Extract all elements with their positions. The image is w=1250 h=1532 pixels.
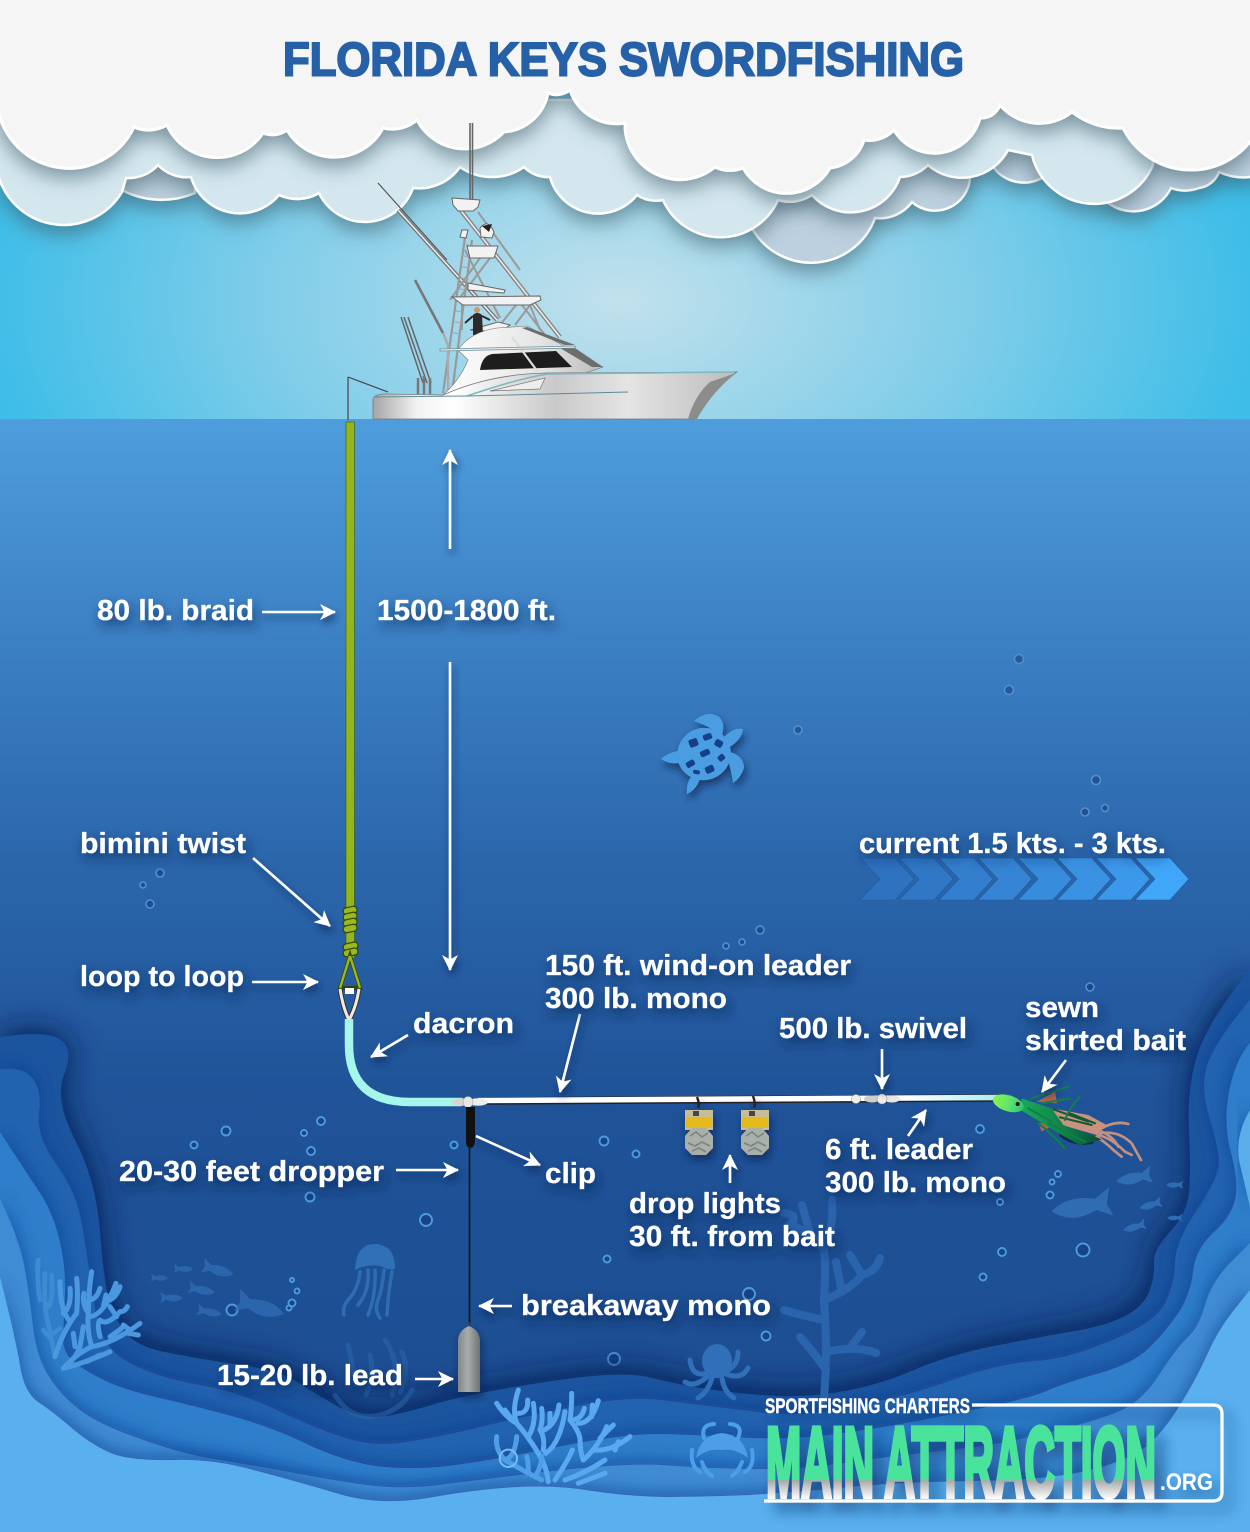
bottom coral bubble bbox=[500, 1450, 517, 1467]
label: 6 ft leader bbox=[825, 1134, 1006, 1199]
arrow: bimini twist bbox=[253, 858, 330, 926]
label: wind-on leader: 300 lb. mono bbox=[545, 983, 727, 1015]
sky background bbox=[0, 0, 1250, 420]
label: breakaway mono: breakaway mono bbox=[521, 1290, 771, 1322]
layer 5 foreground bbox=[0, 1277, 1250, 1532]
arrow: 80 lb braid bbox=[262, 611, 335, 613]
arrow: wind-on leader bbox=[560, 1014, 580, 1092]
turtle shell patches bbox=[685, 732, 726, 775]
back cloud layer bbox=[122, 120, 1250, 263]
drop light one bbox=[685, 1097, 713, 1155]
logo domain: .ORG bbox=[1160, 1469, 1213, 1496]
ocean water bbox=[0, 419, 1250, 1532]
arrow: dropper bbox=[396, 1169, 458, 1171]
label: wind-on leader: 150 ft. wind-on leader bbox=[545, 950, 851, 982]
squid tentacles bbox=[1097, 1123, 1141, 1160]
logo: main attraction bbox=[764, 1395, 1222, 1518]
centre coral bbox=[784, 1200, 880, 1400]
depth arrow up bbox=[449, 450, 451, 549]
arrow: dacron bbox=[371, 1035, 408, 1057]
bubbles bbox=[190, 1117, 1090, 1365]
octopus arms bbox=[685, 1352, 748, 1398]
left coral bbox=[38, 1260, 140, 1368]
arrow: 6 ft leader bbox=[908, 1110, 926, 1136]
boat trim lines bbox=[375, 346, 735, 397]
dacron line bbox=[349, 1019, 462, 1102]
octopus bbox=[685, 1344, 748, 1398]
skirted squid bait bbox=[991, 1087, 1141, 1160]
angler on boat bbox=[465, 307, 490, 335]
arrow: lead bbox=[415, 1378, 453, 1380]
school of fish right bbox=[1049, 1166, 1183, 1235]
500 lb swivel bbox=[852, 1094, 900, 1104]
boat cabin bbox=[443, 326, 603, 395]
boat bow shading bbox=[688, 373, 736, 419]
arrow: swivel bbox=[881, 1049, 883, 1089]
label: dropper: 20-30 feet dropper bbox=[119, 1156, 384, 1188]
lead weight bbox=[458, 1321, 480, 1392]
paper clouds bbox=[0, 0, 1250, 263]
jellyfish tentacles bbox=[344, 1270, 392, 1318]
label: lead: 15-20 lb. lead bbox=[217, 1360, 403, 1392]
boat radar dome bbox=[482, 224, 492, 232]
label: sewn skirted bait: sewn bbox=[1025, 992, 1099, 1024]
label: depth: 1500-1800 ft. bbox=[377, 595, 556, 627]
clip connector bbox=[451, 1096, 488, 1108]
label: loop to loop: loop to loop bbox=[80, 961, 244, 993]
turtle flippers bbox=[661, 714, 744, 794]
arrow: drop lights bbox=[729, 1155, 731, 1183]
layer 3 bbox=[0, 1043, 1250, 1532]
depth arrow down bbox=[449, 662, 451, 970]
logo tagline: SPORTFISHING CHARTERS bbox=[765, 1395, 970, 1418]
bottom coral lower branches bbox=[496, 1437, 542, 1480]
squid eye bbox=[1016, 1102, 1020, 1106]
faint background bubbles bbox=[140, 654, 1108, 991]
boat tower platforms bbox=[452, 198, 541, 332]
layer 2 bbox=[0, 1000, 1250, 1532]
left coral front branches bbox=[55, 1272, 140, 1368]
front cloud layer bbox=[0, 0, 1250, 193]
logo frame bbox=[764, 1405, 1222, 1501]
clip dropper sleeve bbox=[466, 1107, 475, 1148]
turtle shell bbox=[669, 719, 739, 789]
label: 80 lb braid: 80 lb. braid bbox=[97, 595, 254, 627]
boat cabin slope detail bbox=[522, 327, 603, 367]
label: sewn skirted bait: skirted bait bbox=[1025, 1025, 1186, 1057]
paper cut sea floor layers bbox=[0, 970, 1250, 1532]
layer 1 bbox=[0, 970, 1250, 1532]
jellyfish bbox=[344, 1244, 395, 1318]
title: FLORIDA KEYS SWORDFISHING bbox=[283, 32, 964, 86]
current arrow chevrons bbox=[860, 858, 1189, 900]
arrow: loop to loop bbox=[252, 981, 318, 983]
label: sewn skirted bait bbox=[1025, 992, 1186, 1057]
label: 6 ft leader: 300 lb. mono bbox=[825, 1167, 1006, 1199]
label: swivel: 500 lb. swivel bbox=[779, 1013, 967, 1045]
crab bbox=[692, 1424, 753, 1476]
label: dacron: dacron bbox=[413, 1008, 514, 1040]
school of fish left bbox=[151, 1258, 287, 1324]
boat windshield bbox=[480, 351, 572, 370]
label: current: current 1.5 kts. - 3 kts. bbox=[859, 828, 1166, 860]
label: drop lights: 30 ft. from bait bbox=[629, 1221, 835, 1253]
right edge lens bbox=[1238, 1107, 1250, 1215]
layer 4 bbox=[0, 1199, 1250, 1532]
crab body bbox=[696, 1433, 748, 1458]
left coral faint back branches bbox=[38, 1260, 60, 1357]
squid fins bbox=[1037, 1092, 1057, 1132]
arrow: skirted bait bbox=[1042, 1060, 1066, 1092]
arrow: clip bbox=[476, 1136, 540, 1165]
wind-on leader mono line bbox=[478, 1098, 1000, 1101]
boat window strut bbox=[512, 337, 538, 372]
boat hull bbox=[373, 372, 737, 419]
seaweed bbox=[335, 1340, 412, 1417]
jellyfish dome bbox=[355, 1244, 395, 1270]
label: wind-on leader bbox=[545, 950, 851, 1015]
squid shadow strands bbox=[1062, 1135, 1092, 1142]
bottom coral bbox=[496, 1390, 630, 1483]
arrow: breakaway mono bbox=[479, 1305, 512, 1307]
80 lb braid line bbox=[346, 422, 354, 958]
label: bimini twist: bimini twist bbox=[80, 828, 246, 860]
squid head bbox=[991, 1091, 1026, 1116]
breakaway mono line bbox=[468, 1148, 470, 1328]
squid green strands bbox=[1028, 1087, 1085, 1148]
depth arrows bbox=[449, 450, 451, 970]
sport fishing boat bbox=[348, 123, 737, 420]
sea turtle bbox=[661, 714, 744, 794]
octopus head bbox=[702, 1344, 732, 1378]
label: 6 ft leader: 6 ft. leader bbox=[825, 1134, 973, 1166]
squid dark stripes bbox=[1053, 1109, 1095, 1125]
squid pink body bbox=[1052, 1108, 1107, 1135]
middle cloud layer bbox=[0, 100, 1153, 237]
squid green skirt bbox=[1022, 1098, 1102, 1145]
boat tower and outriggers bbox=[348, 123, 560, 420]
loop to loop connection bbox=[340, 956, 360, 1020]
drop light two bbox=[741, 1096, 769, 1155]
bimini twist knot bbox=[343, 906, 359, 957]
bottom coral main branches bbox=[497, 1390, 630, 1483]
fishing rig bbox=[340, 422, 1141, 1392]
crab claws and legs bbox=[692, 1424, 753, 1476]
label: drop lights: drop lights bbox=[629, 1188, 781, 1220]
label: drop lights bbox=[629, 1188, 835, 1253]
label: clip: clip bbox=[545, 1158, 596, 1190]
